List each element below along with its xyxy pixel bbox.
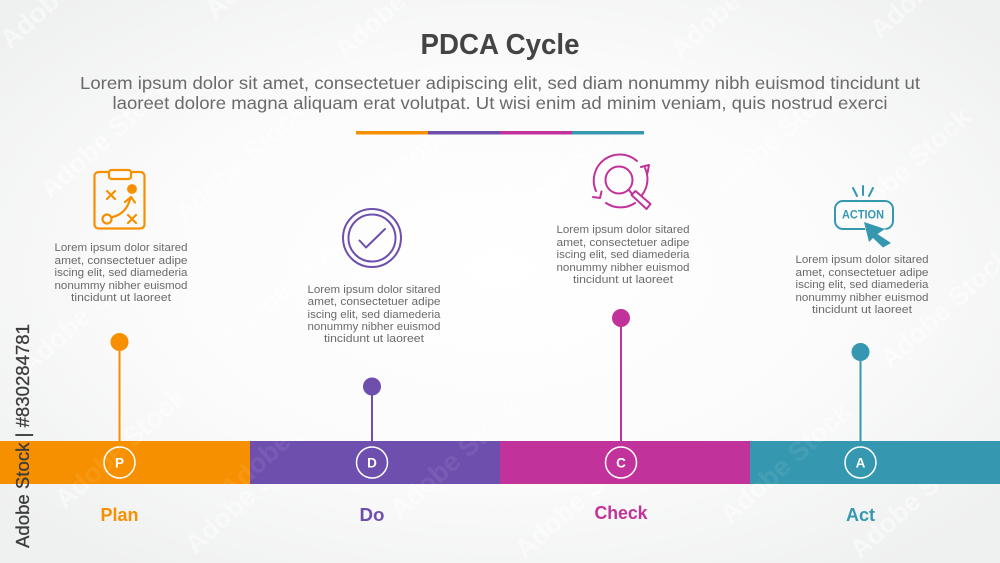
band: do	[250, 441, 500, 484]
icon: magnifier with cycle arrows	[593, 154, 650, 209]
text block: check	[556, 224, 690, 286]
text block: check: amet, consectetuer adipe	[556, 237, 690, 249]
subtitle text	[80, 73, 920, 113]
marker: act	[845, 343, 876, 478]
subtitle text: Lorem ipsum dolor sit amet, consectetuer adipiscing elit, sed diam nonummy nibh euismod tincidunt ut	[80, 73, 920, 93]
text block: do: Lorem ipsum dolor sitared	[308, 284, 440, 296]
text: Adobe Stock	[374, 61, 517, 194]
label: plan: Plan	[100, 505, 138, 525]
text block: plan: nonummy nibher euismod	[54, 280, 188, 292]
label: check: Check	[594, 503, 648, 523]
text: Adobe Stock	[214, 371, 357, 504]
text block: act: amet, consectetuer adipe	[796, 267, 928, 279]
text block: check: Lorem ipsum dolor sitared	[556, 224, 690, 236]
marker: check: C	[616, 456, 626, 470]
text: Adobe Stock	[49, 381, 192, 514]
title underline	[356, 131, 644, 134]
text: Adobe Stock	[844, 431, 987, 563]
text block: act: Lorem ipsum dolor sitared	[796, 254, 928, 266]
text: Adobe Stock	[179, 426, 322, 559]
text block: act	[796, 254, 929, 316]
text block: act: tincidunt ut laoreet	[812, 304, 913, 316]
text: Adobe Stock	[384, 391, 527, 524]
text: Adobe Stock	[49, 381, 192, 514]
marker: do: D	[367, 456, 377, 470]
text: Adobe Stock	[34, 71, 177, 204]
text: Adobe Stock	[544, 231, 687, 364]
subtitle text: laoreet dolore magna aliquam erat volutpat. Ut wisi enim ad minim veniam, quis nostrud exerci	[112, 93, 888, 113]
icon: check mark circle	[343, 209, 401, 267]
marker: do	[356, 378, 388, 478]
band: act	[750, 441, 1000, 484]
text block: plan: Lorem ipsum dolor sitared	[54, 242, 188, 254]
marker: check	[606, 309, 636, 478]
text block: plan: iscing elit, sed diamederia	[54, 267, 188, 279]
text: Adobe Stock	[704, 71, 847, 204]
text: Adobe Stock	[509, 431, 652, 563]
text block: plan: tincidunt ut laoreet	[71, 292, 172, 304]
text: Adobe Stock	[714, 396, 857, 529]
text block: check: nonummy nibher euismod	[556, 262, 690, 274]
text block: check: tincidunt ut laoreet	[573, 274, 674, 286]
text: Adobe Stock	[214, 221, 357, 354]
text: Adobe Stock	[14, 246, 157, 379]
text block: act: nonummy nibher euismod	[796, 292, 928, 304]
text: Adobe Stock	[169, 96, 312, 229]
marker: act: A	[856, 456, 866, 470]
icon: action button with cursor	[835, 186, 893, 248]
icon: clipboard strategy	[94, 170, 144, 228]
text: Adobe Stock	[714, 396, 857, 529]
band: check	[500, 441, 750, 484]
text: Adobe Stock	[499, 101, 642, 234]
band: plan	[0, 441, 250, 484]
text block: act: iscing elit, sed diamederia	[796, 279, 929, 291]
text block: do	[308, 284, 441, 345]
title: PDCA Cycle	[420, 29, 580, 61]
text block: do: iscing elit, sed diamederia	[308, 309, 441, 321]
text block: do: nonummy nibher euismod	[308, 321, 440, 333]
label: do: Do	[360, 505, 384, 525]
text block: check: iscing elit, sed diamederia	[556, 249, 690, 261]
text block: plan	[54, 242, 188, 304]
text block: plan: amet, consectetuer adipe	[54, 255, 188, 267]
text: Adobe Stock	[384, 391, 527, 524]
label: act: Act	[846, 505, 875, 525]
icon: action button with cursor: ACTION	[842, 208, 884, 222]
marker: plan	[104, 333, 135, 478]
marker: plan: P	[115, 456, 124, 470]
text block: do: tincidunt ut laoreet	[324, 333, 425, 345]
stock image id: Adobe Stock | #830284781	[12, 324, 33, 548]
text block: do: amet, consectetuer adipe	[308, 296, 440, 308]
text: Adobe Stock	[834, 101, 977, 234]
